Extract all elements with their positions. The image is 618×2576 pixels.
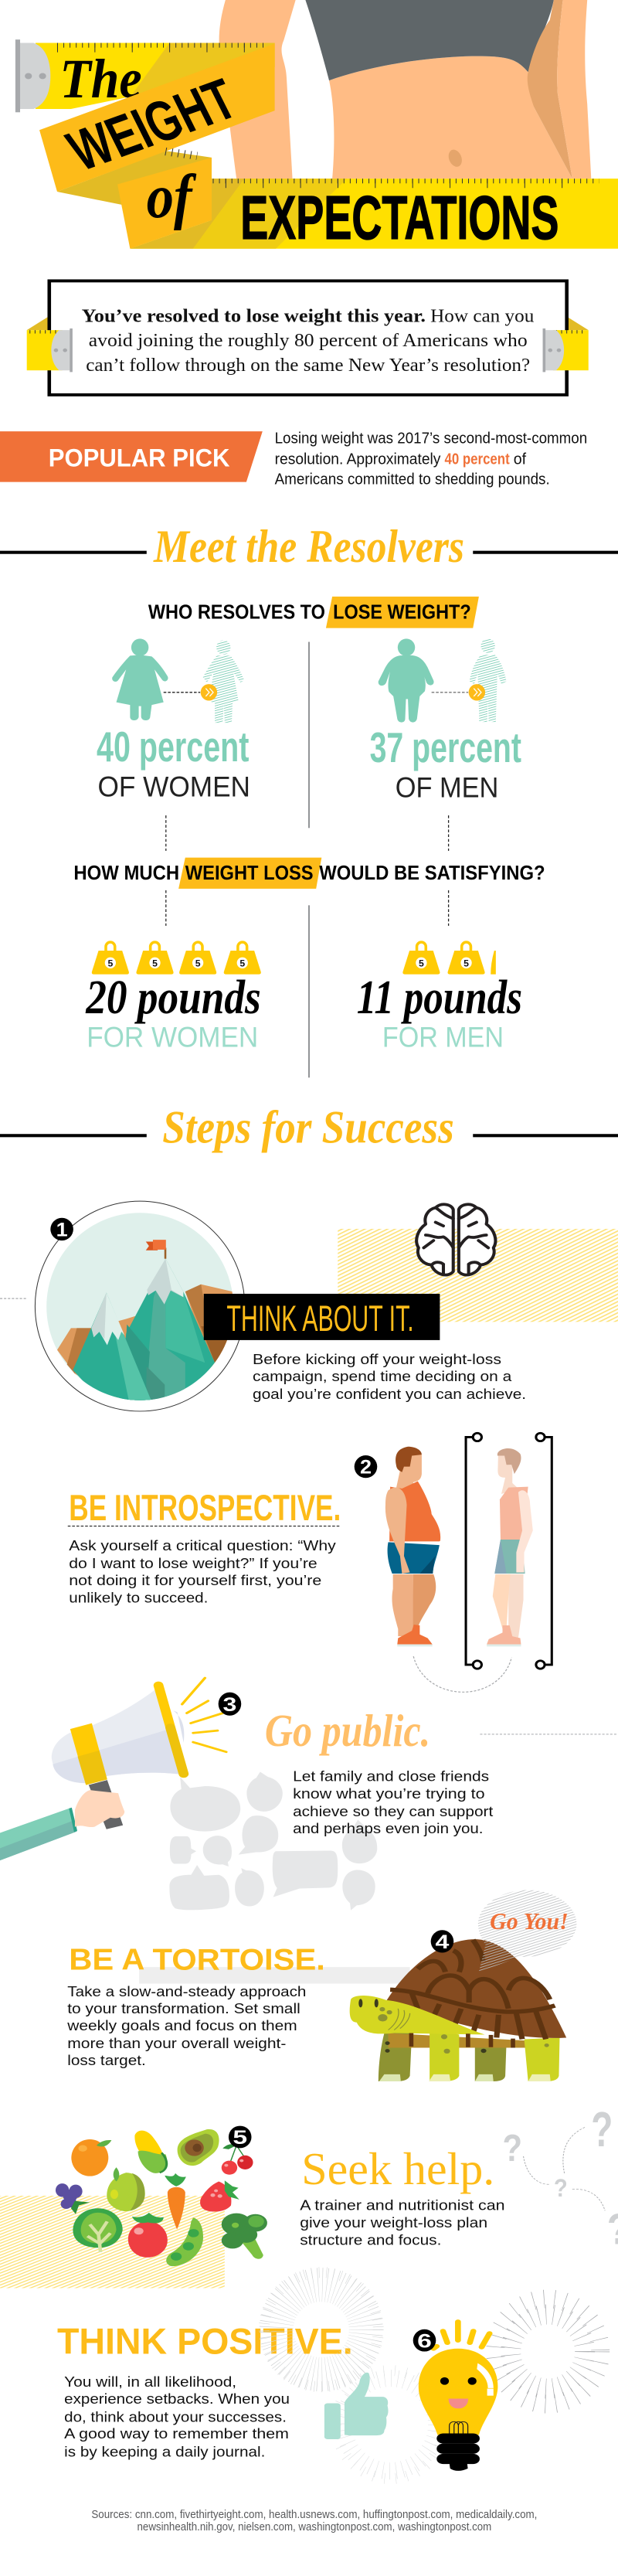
intro text: How can you <box>430 305 535 326</box>
text: step 4 <box>66 1984 306 2068</box>
avocado <box>178 2129 219 2166</box>
text: step 6: do, think about your successes. <box>64 2408 287 2425</box>
illustration: mountains <box>35 1201 245 1411</box>
illustration: megaphone <box>0 1678 226 1860</box>
heading: meet the resolvers: Meet the Resolvers <box>153 521 464 573</box>
text: step 3: know what you’re trying to <box>293 1786 485 1802</box>
tape fold: shaded band <box>57 151 212 221</box>
badge: step 6 <box>413 2329 436 2352</box>
text: step 5: A trainer and nutritionist can <box>300 2197 505 2214</box>
text: step 1: Before kicking off your weight-loss <box>253 1352 501 1368</box>
text: step 4: more than your overall weight- <box>67 2036 286 2051</box>
badge: step 3 <box>219 1693 241 1716</box>
text: step 5: give your weight-loss plan <box>300 2214 487 2231</box>
icons: weights for women: 5 <box>239 958 245 968</box>
icons: weights for women <box>92 941 261 975</box>
panel: steps 3 and 4 <box>0 1678 618 2081</box>
intro text: You’ve resolved to lose weight this year. <box>82 305 426 326</box>
speech bubbles <box>169 1771 377 1911</box>
intro text <box>82 305 535 376</box>
heading: think about it <box>204 1294 440 1340</box>
illustration: fruit and vegetables <box>56 2129 267 2266</box>
question: how much weight loss <box>73 858 545 889</box>
heading: be introspective: BE INTROSPECTIVE. <box>69 1489 341 1529</box>
text: step 4: weekly goals and focus on them <box>66 2018 297 2033</box>
text: popular pick description: resolution. Approximately <box>275 450 440 468</box>
panel: steps 5 and 6 <box>0 2102 618 2533</box>
panel: meet the resolvers <box>0 521 618 1153</box>
text: step 2: not doing it for yourself first, you’re <box>69 1573 321 1589</box>
text: step 2: unlikely to succeed. <box>69 1590 208 1607</box>
icons: weights for men: 5 <box>419 958 424 968</box>
heading: steps for success: Steps for Success <box>162 1101 454 1153</box>
text: step 1: goal you’re confident you can achieve. <box>253 1387 526 1403</box>
intro text: avoid joining the roughly 80 percent of Americans who <box>89 329 528 350</box>
carrot <box>165 2173 186 2229</box>
icons: weights for women: 5 <box>195 958 201 968</box>
icons: weights for men <box>402 941 496 975</box>
panel: header <box>0 0 618 488</box>
icons: weights for women: 5 <box>152 958 158 968</box>
badge: step 2 <box>355 1455 377 1478</box>
illustration: slim reflection <box>487 1448 533 1646</box>
badge: step 5: 5 <box>233 2127 247 2149</box>
intro text: can’t follow through on the same New Year’s resolution? <box>86 354 530 376</box>
text: step 3: achieve so they can support <box>293 1804 493 1819</box>
stat: 40 percent of women: 40 percent <box>97 723 249 771</box>
badge: step 1 <box>50 1218 73 1240</box>
title band: WEIGHT: WEIGHT <box>58 67 246 183</box>
question: how much weight loss: WEIGHT LOSS <box>185 863 314 884</box>
speech bubble: go you <box>478 1890 576 1972</box>
badge: step 1: 1 <box>56 1218 68 1240</box>
stat: 11 pounds for men: FOR MEN <box>382 1021 504 1053</box>
stat: 20 pounds for women: 20 pounds <box>85 972 261 1024</box>
orange <box>71 2139 111 2176</box>
text: step 5 <box>300 2197 505 2248</box>
illustration: mirror <box>466 1433 552 1669</box>
pear <box>107 2167 145 2211</box>
tomato <box>128 2213 168 2258</box>
text: step 3: and perhaps even join you. <box>293 1821 484 1836</box>
illustration: overweight man <box>385 1447 440 1646</box>
pattern block: yellow hatch behind brain <box>338 1229 618 1322</box>
question: how much weight loss: WOULD BE SATISFYING? <box>319 863 545 884</box>
question: who resolves: WHO RESOLVES TO <box>148 601 325 623</box>
text: step 2: Ask yourself a critical question: “Why <box>69 1538 336 1554</box>
text: step 5: structure and focus. <box>300 2232 441 2248</box>
heading: meet the resolvers <box>0 521 618 573</box>
title band: of: of <box>147 162 197 230</box>
text: step 6: is by keeping a daily journal. <box>64 2443 265 2460</box>
text: popular pick description: 40 percent <box>445 450 510 468</box>
pattern block: yellow hatch behind food <box>0 2196 225 2288</box>
text: step 4: Take a slow-and-steady approach <box>67 1984 306 1999</box>
text: popular pick description: Americans committed to shedding pounds. <box>275 470 550 488</box>
illustration: light bulb <box>419 2322 497 2471</box>
cabbage <box>73 2208 123 2252</box>
strawberry <box>200 2180 239 2212</box>
text: step 6: A good way to remember them <box>64 2425 289 2442</box>
tape measure: top <box>15 39 275 112</box>
stat: 20 pounds for women: FOR WOMEN <box>87 1021 258 1053</box>
text: popular pick description: of <box>514 450 527 468</box>
banner: popular pick <box>0 431 263 482</box>
decorative burst: right <box>495 2299 600 2404</box>
icons: question marks: ? <box>554 2174 568 2203</box>
question: who resolves: LOSE WEIGHT? <box>333 601 471 623</box>
illustration: torso <box>219 0 591 179</box>
heading: think positive: THINK POSITIVE. <box>57 2321 353 2362</box>
decorative burst: upper <box>264 2272 379 2387</box>
heading: go public: Go public. <box>265 1705 430 1756</box>
heading: be a tortoise: BE A TORTOISE. <box>69 1944 325 1976</box>
text: step 2 <box>69 1538 336 1607</box>
intro box <box>27 281 589 395</box>
icon: brain <box>416 1204 495 1275</box>
text: step 2: do I want to lose weight?” If you’re <box>69 1556 317 1572</box>
stat: 20 pounds for women <box>85 972 261 1053</box>
peapod <box>166 2217 203 2266</box>
tape: left <box>27 328 73 372</box>
corn <box>134 2131 167 2173</box>
stat: 37 percent of men: OF MEN <box>396 772 498 804</box>
badge: step 2: 2 <box>360 1456 372 1478</box>
text: step 1 <box>253 1352 526 1403</box>
stat: 37 percent of men <box>370 723 521 804</box>
stat: 11 pounds for men <box>357 972 522 1053</box>
icons: weights for men: 5 <box>464 958 469 968</box>
title band: WEIGHT <box>39 43 275 192</box>
sources <box>91 2508 537 2533</box>
stat: 40 percent of women <box>97 723 250 803</box>
stat: 40 percent of women: OF WOMEN <box>98 771 250 803</box>
text: step 1: campaign, spend time deciding on a <box>253 1369 511 1385</box>
blueberries <box>56 2183 90 2214</box>
text: step 6 <box>64 2374 290 2460</box>
icons: question marks <box>503 2102 618 2254</box>
banner: popular pick: POPULAR PICK <box>49 444 229 472</box>
title band: of <box>117 158 212 249</box>
badge: step 6: 6 <box>417 2330 432 2352</box>
badge: step 5 <box>229 2126 252 2149</box>
icons: weights for women: 5 <box>107 958 113 968</box>
badge: step 4: 4 <box>436 1931 449 1953</box>
text: step 4: loss target. <box>67 2053 146 2068</box>
text: step 3: Let family and close friends <box>293 1769 489 1785</box>
decorative burst: lower <box>336 2370 444 2479</box>
panel: steps 1 and 2 <box>0 1201 618 1692</box>
icon: woman before and after <box>112 638 244 723</box>
text: step 6: experience setbacks. When you <box>64 2391 290 2407</box>
title word: The: The <box>60 48 142 109</box>
stat: 37 percent of men: 37 percent <box>370 723 521 771</box>
stat: 11 pounds for men: 11 pounds <box>357 972 522 1024</box>
heading: steps for success <box>0 1101 618 1153</box>
heading: think about it: THINK ABOUT IT. <box>226 1299 414 1339</box>
speech bubble: go you: Go You! <box>490 1907 569 1935</box>
badge: step 3: 3 <box>223 1694 236 1716</box>
icon: man before and after <box>379 638 507 723</box>
tape measure: bottom <box>130 151 618 249</box>
text: popular pick description <box>275 429 587 488</box>
tape: right <box>543 328 589 372</box>
cherries <box>222 2144 253 2175</box>
question: how much weight loss: HOW MUCH <box>73 863 179 884</box>
broccoli <box>222 2214 267 2259</box>
question: who resolves <box>148 597 479 628</box>
text: step 6: You will, in all likelihood, <box>64 2374 236 2390</box>
illustration: tortoise <box>350 1939 566 2081</box>
icons: question marks: ? <box>503 2127 522 2169</box>
text: step 4: to your transformation. Set small <box>67 2001 301 2016</box>
heading: seek help: Seek help. <box>301 2144 494 2195</box>
icon: thumbs up <box>324 2373 389 2439</box>
badge: step 4 <box>431 1930 453 1953</box>
text: step 3 <box>293 1769 493 1836</box>
